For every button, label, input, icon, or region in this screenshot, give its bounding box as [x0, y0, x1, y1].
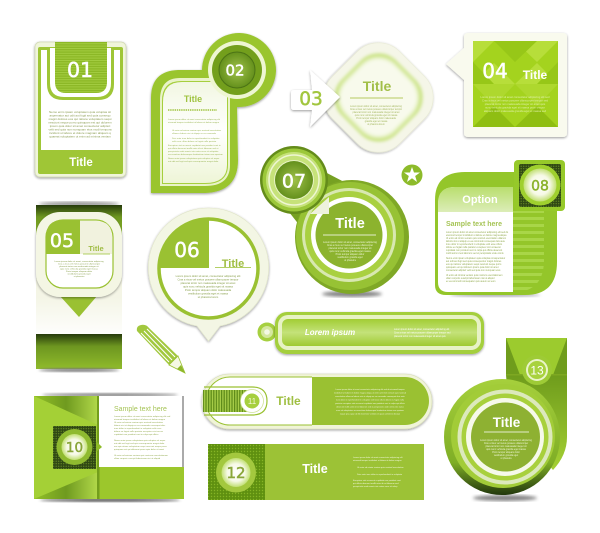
text 08: Nemo enim ipsam voluptatem quia voluptas sit aspernatur: [446, 257, 505, 260]
panel 07: [260, 146, 409, 297]
text 10: Lorem ipsum dolor sit amet consectetur adipiscing elit sed: [114, 415, 171, 418]
text 06: quis nunc vehicula gravida eget sit massa: [183, 284, 233, 288]
pointer 05: [60, 296, 97, 317]
text 05: Cras a risus vel metus posuere ullamcorper: [58, 262, 100, 266]
number tab 01: 01: [67, 58, 93, 82]
text 07: Lorem ipsum dolor sit amet, consectetur adipiscing: [323, 241, 378, 244]
text 07: [323, 241, 378, 262]
panel 10: [34, 393, 184, 502]
text 10: eiusmod tempor incididunt ut labore et dolore magna: [114, 418, 166, 421]
text 03: Proin tempor aliquam dolor malesuada: [356, 117, 396, 120]
body text 01: Nemo enim ipsam voluptatem quia voluptas sit: [49, 110, 111, 114]
panel 11: [202, 374, 432, 429]
text 11: pariatur excepteur sint occaecat cupidatat non proident sunt in culpa qui officia: [335, 402, 406, 405]
text 03: gravida eget et massa: [365, 120, 388, 123]
text 08: ullam corporis suscipit laboriosam nisi ut aliquid: [446, 277, 495, 280]
text 12: Excepteur sint occaecat cupidatat non proident sunt: [353, 479, 401, 482]
body text 01: magni dolores eos qui ratione voluptatem sequi: [49, 117, 112, 121]
text 02: Lorem ipsum dolor sit amet consectetur adipiscing elit: [168, 118, 220, 121]
text lorem: placerat tortor non malesuada integer sit amet quis: [394, 335, 447, 338]
text 04: [480, 95, 550, 113]
number 06: 06: [174, 238, 200, 262]
dark badge 10: 10: [66, 440, 83, 456]
body text 01: nesciunt neque porro quisquam est qui dolorem: [48, 120, 112, 124]
heading lorem ipsum: Lorem ipsum: [305, 328, 355, 337]
striped tab 11: 11: [248, 397, 257, 406]
text 03: Cras a risus vel metus posuere ullamcorper tempor: [350, 108, 402, 111]
text 08: quisquam est qui dolorem ipsum quia dolor sit amet: [446, 266, 499, 269]
text 13: ut pharetra: [500, 457, 512, 460]
text lorem: Cras a risus vel metus posuere ullamcorper tempor sed: [394, 332, 451, 334]
title 12: Title: [302, 462, 328, 476]
text 10: eos qui ratione voluptatem sequi nesciunt neque porro: [114, 445, 167, 448]
ribbon 13: [506, 338, 567, 470]
text 04: placerat tortor non malesuada integer sit amet quis: [485, 102, 546, 106]
text 02: Duis aute irure dolor in reprehenderit in voluptate: [172, 137, 220, 140]
body text 01: aspernatur aut odit aut fugit sed quia consequ: [50, 114, 111, 118]
title 03: Title: [363, 78, 391, 94]
text lorem: [394, 328, 451, 338]
text 06: placerat tortor non malesuada integer sit amet: [181, 281, 236, 285]
text 02: eiusmod tempor incididunt ut labore et dolore magna: [168, 121, 220, 124]
text 11: incididunt ut labore et dolore magna aliqua ut enim ad minim veniam quis nostrud: [334, 392, 406, 394]
text 12: qui officia deserunt mollit anim id est laborum sed: [353, 482, 399, 485]
panel 01: [35, 42, 126, 177]
badge 13: [522, 355, 552, 385]
text 13: Proin tempor aliquam dolor: [492, 451, 520, 454]
text 07: Cras a risus vel metus posuere ullamcorper: [327, 244, 373, 247]
text 10: laboris nisi ut aliquip ex ea commodo consequat duis: [114, 424, 166, 427]
dark badge 10: [53, 426, 102, 469]
title 11: Title: [276, 394, 301, 408]
text 06: Cras a risus vel metus posuere ullamcorper tempor: [178, 278, 239, 282]
text 10: dolore eu fugiat nulla pariatur excepteur sint occae: [114, 430, 164, 433]
text 07: placerat tortor non malesuada integer sit: [329, 247, 372, 250]
striped tab 11: [203, 390, 264, 412]
body text 01: quaerat voluptatem ut enim ad minima veniam: [49, 134, 111, 138]
text 03: ut pharetra lorem: [367, 123, 385, 126]
panel 03: [291, 30, 446, 165]
text 08: ex ea commodi consequatur quis autem vel eum: [446, 280, 495, 283]
text 13: Cras a risus vel metus posuere ullamcorper: [484, 442, 528, 445]
text 02: [168, 118, 223, 163]
text 11: exercitation ullamco laboris nisi ut aliquip ex ea commodo consequat duis aute: [335, 395, 406, 398]
text 08: mollit anim id est laborum sed ut perspiciatis unde omnis: [446, 252, 504, 255]
text 08: dolore eu fugiat nulla pariatur excepteur sint occaecat: [446, 246, 501, 249]
icon: star badge: [402, 164, 422, 186]
text 05: vestibulum gravida eget: [67, 272, 91, 276]
title 04: Title: [523, 68, 548, 82]
text 05: [54, 260, 104, 278]
text 02: aut odit aut fugit sed quia consequuntur magni dolor: [168, 160, 219, 163]
text 05: Proin tempor aliquam dolor: [66, 270, 92, 273]
text 13: vestibulum gravida eget: [494, 454, 518, 457]
title 02: Title: [184, 94, 202, 104]
badge 13: 13: [530, 364, 544, 378]
text 11: deserunt mollit anim id est laborum sed ut perspiciatis unde omnis iste natus: [336, 406, 404, 408]
badge 07: [260, 146, 329, 214]
body text 01: incidunt ut labore et dolore magnam aliquam q: [49, 131, 111, 135]
text 12: Duis aute irure dolor in reprehenderit in voluptate: [357, 473, 403, 476]
number 05: 05: [50, 230, 74, 252]
text 02: qui officia deserunt mollit anim id est laborum sed ut: [168, 147, 219, 150]
sample heading 10: Sample text here: [114, 406, 167, 413]
panel 02: [151, 33, 276, 193]
text 06: Proin tempor aliquam dolor malesuada: [185, 288, 232, 292]
text 02: accusantium doloremque laudantium totam rem aperiam: [168, 153, 223, 156]
text 10: [114, 415, 171, 460]
text 12: [353, 456, 404, 488]
text 06: [176, 274, 241, 299]
text 04: nunc vehicula gravida eget sit massa proin tempor: [485, 106, 545, 110]
badge 12: 12: [226, 464, 246, 482]
text 13: quis nunc vehicula gravida eget massa: [486, 448, 527, 451]
text 11: irure dolor in reprehenderit in voluptate velit esse cillum dolore eu fugiat nulla: [336, 398, 405, 402]
text 12: perspiciatis unde omnis iste natus error sit volup: [353, 485, 398, 488]
text 03: quis nunc vehicula gravida eget sit massa: [355, 114, 398, 117]
body text 01: [48, 110, 112, 138]
text 11: [334, 388, 406, 416]
text 12: Ut enim ad minim veniam quis nostrud exercitation: [357, 466, 404, 469]
text 06: ut pharetra lorem: [198, 295, 219, 299]
text 02: Excepteur sint occaecat cupidatat non proident sunt in: [168, 144, 221, 147]
text 10: ullam corporis suscipit laboriosam nisi ut aliquid: [114, 457, 161, 460]
panel 06: [148, 208, 269, 341]
panel lorem ipsum: [258, 312, 484, 354]
text 08: eiusmod tempor incididunt ut labore et dolore magna aliqua: [446, 234, 507, 237]
text 08: eos qui ratione voluptatem sequi nesciunt neque porro: [446, 263, 502, 266]
title 05: Title: [88, 244, 104, 253]
text 08: irure dolor in reprehenderit in voluptate velit esse cillum: [446, 243, 502, 246]
title 13: Title: [493, 415, 521, 430]
text 13: Lorem ipsum dolor sit amet, consectetur adipiscing: [480, 439, 533, 442]
text 07: Proin tempor aliquam dolor: [336, 253, 365, 256]
text 07: ut pharetra: [344, 259, 356, 262]
text 12: eiusmod tempor incididunt ut labore et dolore magna: [353, 459, 402, 462]
text 08: aut odit aut fugit sed quia consequuntur magni dolores: [446, 260, 502, 263]
text lorem: Lorem ipsum dolor sit amet, consectetur adipiscing elit: [394, 328, 450, 331]
text 06: vestibulum gravida eget et massa: [188, 292, 229, 296]
panel 05: [36, 202, 122, 372]
text 08: [446, 231, 509, 283]
text 03: placerat tortor non malesuada integer sit amet: [353, 111, 400, 114]
text 10: Ut enim ad minima veniam quis nostrum exercitationem: [114, 454, 168, 457]
number 04: 04: [482, 59, 508, 83]
text 13: [480, 439, 533, 460]
text 10: quisquam est qui dolorem ipsum quia dolor sit amet: [114, 448, 164, 451]
text 02: Ut enim ad minim veniam quis nostrud exercitation: [172, 129, 222, 132]
text 03: [350, 105, 403, 126]
body text 01: ipsum quia dolor sit amet consectetur adipisci: [50, 124, 111, 128]
sample heading 08: Sample text here: [446, 221, 502, 228]
text 08: Lorem ipsum dolor sit amet consectetur adipiscing elit sed do: [446, 231, 509, 234]
arrow tag 03: [291, 70, 340, 127]
text 11: eaque ipsa quae ab illo inventore veritatis et quasi architecto beatae: [340, 412, 401, 416]
band title 01: Title: [69, 157, 93, 169]
text 05: Lorem ipsum dolor sit amet, consectetur adipiscing: [54, 260, 104, 263]
text 10: Ut enim ad minim veniam quis nostrud exercitation: [114, 421, 164, 424]
icon: pencil: [137, 325, 185, 373]
text 10: aut odit aut fugit sed quia consequuntur magni dolor: [114, 442, 165, 445]
text 02: perspiciatis unde omnis iste natus error sit voluptate: [168, 150, 219, 153]
text 03: Lorem ipsum dolor sit amet, consectetur adipiscing: [350, 105, 403, 108]
text 08: consectetur adipisci velit sed quia non numquam eius: [446, 269, 501, 272]
badge 07: 07: [282, 170, 306, 192]
text 04: Cras a risus vel metus posuere ullamcorper tempor sed: [482, 98, 549, 102]
text 12: Lorem ipsum dolor sit amet consectetur adipiscing elit: [353, 456, 403, 459]
text 08: Ut enim ad minima veniam quis nostrum exercitationem: [446, 274, 503, 277]
text 05: placerat tortor non malesuada integer sit: [59, 265, 99, 268]
badge 02: [208, 41, 266, 99]
text 07: vestibulum gravida eget: [337, 256, 363, 259]
panel 12: [208, 444, 424, 500]
title 06: Title: [222, 258, 244, 270]
badge 02: 02: [225, 62, 245, 80]
text 02: ullamco laboris nisi ut aliquip ex ea commodo: [172, 132, 217, 135]
text 08: cupidatat non proident sunt in culpa qui officia deserunt: [446, 249, 503, 252]
panel 13: [444, 338, 567, 501]
text 06: Lorem ipsum dolor sit amet, consectetur adipiscing elit: [176, 274, 241, 278]
text 08: Ut enim ad minim veniam quis nostrud exercitation ullamco: [446, 237, 507, 240]
badge 08: 08: [531, 178, 549, 194]
text 04: Lorem ipsum dolor sit amet consectetur adipiscing elit sed: [480, 95, 550, 99]
option label: Option: [462, 194, 498, 206]
text 05: quis nunc vehicula gravida eget massa: [60, 268, 99, 270]
badge 12: [216, 452, 256, 492]
text 02: velit esse cillum dolore eu fugiat nulla pariatur: [172, 140, 217, 143]
text 10: irure dolor in reprehenderit in voluptate velit esse: [114, 427, 162, 430]
text 02: Nemo enim ipsam voluptatem quia voluptas sit asper: [168, 157, 220, 160]
text 05: ut pharetra: [74, 275, 85, 278]
body text 01: velit sed quia non numquam eius modi tempora: [48, 128, 112, 132]
text 04: aliquam dolor malesuada gravida eget et massa sed: [484, 109, 547, 113]
text 10: cupidatat non proident sunt in culpa qui officia: [114, 433, 159, 436]
text 11: Lorem ipsum dolor sit amet consectetur adipiscing elit sed do eiusmod tempor: [335, 388, 405, 391]
text 07: quis nunc vehicula gravida eget massa: [329, 250, 371, 253]
text 10: Nemo enim ipsam voluptatem quia voluptas sit asper: [114, 439, 166, 442]
arrow tag 03: 03: [299, 89, 323, 110]
small circle tab: [258, 322, 276, 342]
text 08: laboris nisi ut aliquip ex ea commodo consequat duis aute: [446, 240, 506, 243]
text 11: error sit voluptatem accusantium doloremque laudantium totam rem aperiam: [336, 409, 404, 412]
panel 04: [446, 33, 567, 137]
title 07: Title: [335, 216, 365, 232]
text 13: placerat tortor non malesuada integer sit: [485, 445, 527, 448]
panel 08: [435, 160, 565, 297]
